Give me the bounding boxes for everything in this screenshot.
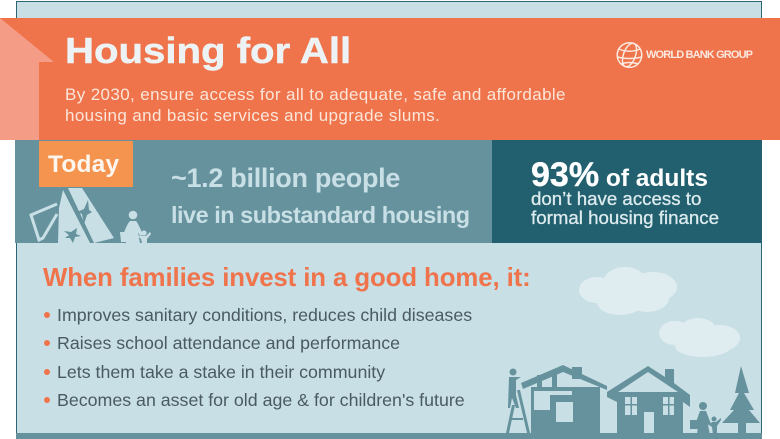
- bottom ground band: [16, 433, 762, 439]
- panel: benefits: [16, 243, 762, 433]
- logo text: WORLD BANK GROUP: [646, 49, 752, 61]
- goal text: [65, 85, 566, 125]
- list item: Raises school attendance and performance: [57, 333, 400, 353]
- logo: World Bank Group: [616, 42, 753, 68]
- list item: Improves sanitary conditions, reduces child diseases: [57, 305, 472, 325]
- icon: torn tent and family: [29, 188, 151, 243]
- icon: globe: [616, 42, 642, 68]
- badge: today: [39, 141, 133, 187]
- icon: house roof shape: [0, 18, 54, 140]
- icon: house: [607, 366, 690, 435]
- panel: orange banner: [0, 18, 780, 140]
- bullet: [44, 340, 50, 346]
- heading: When families invest in a good home, it:: [43, 264, 531, 292]
- bullet: [44, 369, 50, 375]
- finance text: 93% of adults: [531, 156, 708, 194]
- icon: cloud: [579, 267, 677, 315]
- illustration: clouds, houses and family: [506, 267, 760, 433]
- icon: small cloud: [659, 318, 740, 357]
- bullet: [44, 397, 50, 403]
- panel: finance statistic: formal housing finance: [531, 206, 719, 228]
- list item: Becomes an asset for old age & for children's future: [57, 390, 465, 410]
- icon: house under construction: [521, 365, 607, 435]
- benefits list: [44, 305, 472, 410]
- panel: finance statistic: [492, 140, 762, 243]
- icon: pine tree: [722, 366, 760, 435]
- panel: today statistic: live in substandard housing: [171, 202, 470, 228]
- panel: finance statistic: don’t have access to: [531, 188, 701, 209]
- title: Housing for All: [65, 30, 351, 71]
- icon: mother and child: [690, 402, 721, 435]
- goal text: housing and basic services and upgrade slums.: [65, 106, 440, 125]
- goal text: By 2030, ensure access for all to adequate, safe and affordable: [65, 85, 566, 104]
- badge text: Today: [48, 151, 119, 178]
- list item: Lets them take a stake in their community: [57, 362, 385, 382]
- statistic text: ~1.2 billion people: [171, 163, 400, 193]
- panel: today statistic: [15, 140, 492, 243]
- icon: person on ladder: [506, 368, 530, 433]
- bullet: [44, 312, 50, 318]
- panel: top sky strip: [16, 1, 762, 19]
